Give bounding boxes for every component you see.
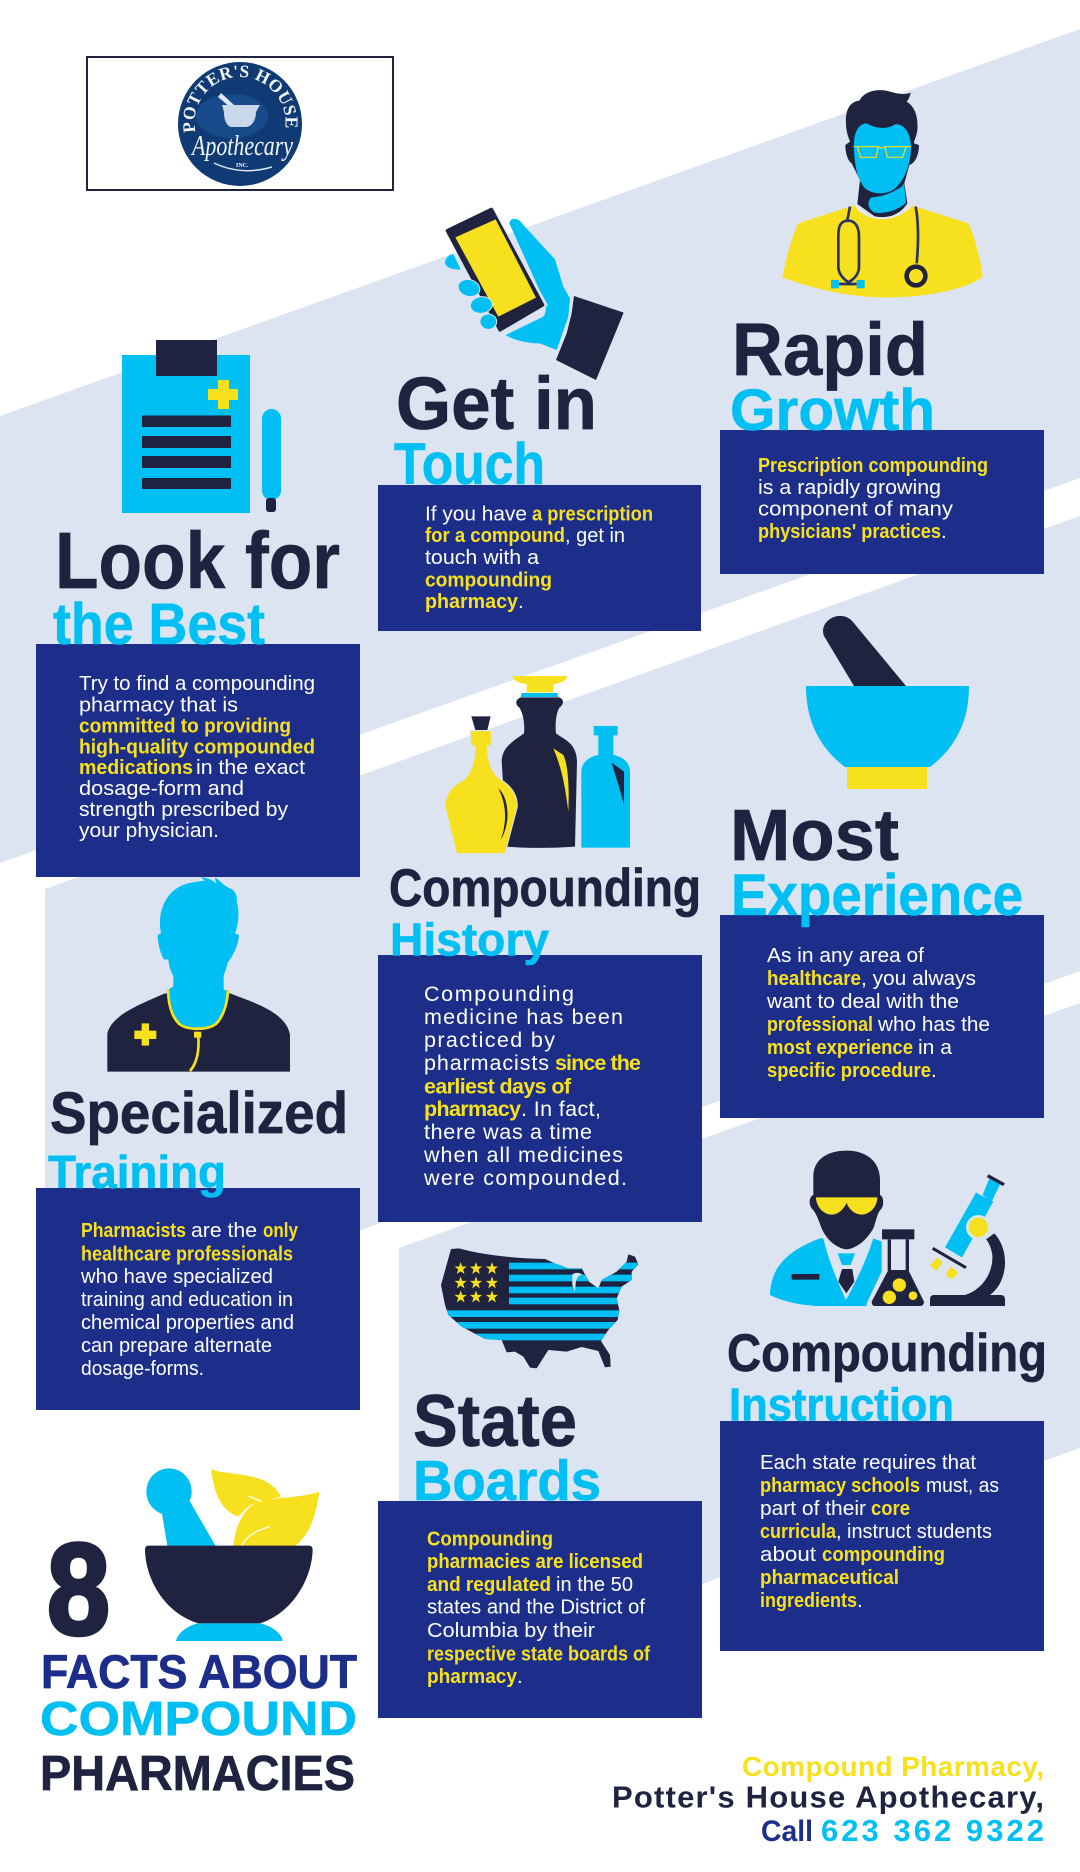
body text: must, as [926, 1474, 999, 1497]
heading [727, 1324, 1047, 1430]
body box [378, 485, 701, 631]
body text: curricula [760, 1520, 837, 1543]
body text: healthcare professionals [81, 1242, 293, 1266]
icon: USA flag map [441, 1248, 638, 1368]
panel: compounding instruction [720, 1151, 1047, 1651]
body text: pharmacy that is [79, 694, 238, 716]
body text: high-quality compounded [79, 736, 315, 758]
body text [79, 672, 315, 842]
body text: Pharmacists [81, 1219, 186, 1242]
title text: FACTS ABOUT [41, 1645, 357, 1698]
heading: State [413, 1381, 577, 1462]
body text [758, 454, 988, 543]
body text: healthcare [767, 967, 861, 990]
body box [378, 1501, 702, 1718]
heading: the Best [53, 592, 265, 657]
body text: when all medicines [423, 1143, 623, 1167]
logo badge: POTTER'S HOUSE [183, 66, 298, 133]
body text: professional [767, 1013, 873, 1036]
body text: As in any area of [767, 944, 924, 967]
body text [425, 502, 653, 613]
body text: , instruct students [836, 1520, 992, 1543]
body box [36, 644, 360, 877]
panel: compounding history [378, 676, 702, 1222]
heading: History [390, 914, 549, 966]
body text: in a [918, 1036, 953, 1059]
body text: pharmacists [424, 1051, 549, 1075]
heading: Look for [55, 516, 340, 605]
heading [730, 796, 1023, 928]
body text: pharmacy [427, 1665, 518, 1688]
heading [53, 516, 340, 657]
body text: . In fact, [521, 1097, 601, 1121]
panel: state boards [378, 1242, 702, 1718]
heading: Instruction [729, 1378, 954, 1430]
body text: pharmaceutical [760, 1566, 899, 1589]
heading: Training [48, 1146, 226, 1198]
body text: are the [191, 1219, 257, 1242]
icon: pharmacist silhouette [107, 877, 290, 1072]
heading: Specialized [50, 1081, 348, 1146]
body text: practiced by [424, 1028, 555, 1052]
body text: touch with a [425, 546, 540, 569]
body text [80, 1219, 298, 1380]
body text: dosage-forms. [81, 1357, 204, 1380]
panel: rapid growth [720, 90, 1044, 574]
body text: . [941, 520, 947, 543]
body text: Each state requires that [760, 1451, 976, 1474]
heading: Experience [731, 863, 1023, 928]
body text: . [517, 1665, 523, 1688]
body text: Compounding [424, 982, 574, 1006]
body text: is a rapidly growing [758, 476, 941, 499]
body box [378, 955, 702, 1222]
body text: pharmacy [425, 590, 519, 613]
panel: specialized training [36, 877, 360, 1410]
body text: who has the [877, 1013, 990, 1036]
body box [720, 1421, 1044, 1651]
title text [40, 1645, 357, 1801]
title block [40, 1468, 357, 1801]
body text: compounding [425, 568, 552, 592]
body text [423, 982, 641, 1190]
body text: pharmacies are licensed [427, 1550, 643, 1573]
body text [766, 944, 990, 1082]
body text: part of their [760, 1497, 866, 1520]
body box [720, 915, 1044, 1118]
body text: medicine has been [424, 1005, 623, 1029]
panel: look for the best [36, 340, 360, 877]
icon: doctor with stethoscope [782, 90, 983, 297]
heading: Compounding [389, 859, 701, 918]
body text: component of many [758, 498, 954, 520]
icon: three bottles [445, 676, 630, 854]
title text: PHARMACIES [40, 1747, 355, 1801]
body text: were compounded. [423, 1166, 627, 1190]
body text: a prescription [532, 502, 653, 526]
body text [760, 1451, 999, 1612]
heading: Boards [413, 1449, 601, 1513]
body text: , you always [861, 967, 976, 990]
body box [36, 1188, 360, 1410]
heading [389, 859, 701, 966]
body text: want to deal with the [766, 990, 959, 1013]
heading [394, 362, 597, 497]
body text: , get in [565, 524, 625, 547]
body text: If you have [425, 502, 527, 526]
panel: get in touch [378, 209, 701, 631]
body text: and regulated [427, 1573, 551, 1596]
body text: training and education in [81, 1288, 293, 1311]
body text: . [931, 1059, 937, 1082]
body text: medications [79, 756, 193, 779]
footer contact: 623 362 9322 [821, 1813, 1044, 1848]
icon: scientist with flask and microscope [770, 1151, 1005, 1306]
logo badge [178, 62, 302, 186]
body text: pharmacy schools [760, 1474, 920, 1497]
body text: your physician. [79, 819, 219, 842]
body text: who have specialized [80, 1265, 273, 1288]
footer contact: Potter's House Apothecary, [612, 1780, 1044, 1814]
body text: Prescription compounding [758, 454, 988, 477]
body text: earliest days of [424, 1074, 572, 1098]
body text: committed to providing [79, 714, 291, 738]
heading [730, 308, 935, 443]
body text: states and the District of [427, 1596, 645, 1618]
body text: dosage-form and [79, 777, 244, 800]
body text: . [518, 590, 524, 613]
body text: for a compound [425, 524, 565, 547]
heading: Get in [396, 362, 597, 445]
body text: specific procedure [767, 1059, 931, 1082]
body text: . [857, 1589, 863, 1612]
icon: mortar with leaves [145, 1468, 319, 1641]
body text: core [871, 1497, 910, 1520]
heading: Growth [730, 378, 935, 443]
body text: respective state boards of [427, 1642, 650, 1666]
body text: most experience [767, 1036, 913, 1059]
icon: mortar and pestle [806, 616, 969, 789]
heading [48, 1081, 348, 1198]
body text: physicians' practices [758, 520, 941, 543]
logo badge: Apothecary [190, 131, 293, 162]
logo box [86, 56, 394, 191]
body text: can prepare alternate [81, 1334, 272, 1357]
body text: strength prescribed by [79, 798, 289, 821]
body text: since the [555, 1051, 641, 1075]
body text: Compounding [427, 1528, 553, 1550]
body text: pharmacy [424, 1097, 521, 1121]
body text: in the 50 [556, 1573, 633, 1596]
heading: Most [730, 796, 899, 876]
footer contact: Call [761, 1815, 813, 1848]
body text: only [263, 1219, 298, 1242]
heading: Compounding [727, 1324, 1047, 1383]
panel: most experience [720, 616, 1044, 1118]
heading: Rapid [732, 308, 928, 391]
heading: Touch [394, 432, 545, 497]
icon: clipboard and pen [122, 340, 281, 513]
heading [413, 1381, 601, 1513]
body text: in the exact [196, 756, 305, 779]
number 8: 8 [47, 1516, 110, 1662]
body text: Columbia by their [427, 1619, 595, 1642]
body text: ingredients [760, 1589, 857, 1612]
body text: compounding [822, 1543, 945, 1566]
body text: there was a time [424, 1120, 592, 1144]
logo badge: INC. [236, 163, 249, 169]
footer contact: Compound Pharmacy, [742, 1751, 1044, 1782]
body text: about [760, 1543, 816, 1566]
body box [720, 430, 1044, 574]
icon: hand holding phone [445, 209, 624, 380]
body text: Try to find a compounding [79, 672, 315, 695]
body text [427, 1528, 650, 1688]
title text: COMPOUND [40, 1693, 357, 1746]
footer contact [612, 1751, 1044, 1848]
body text: chemical properties and [81, 1311, 294, 1334]
